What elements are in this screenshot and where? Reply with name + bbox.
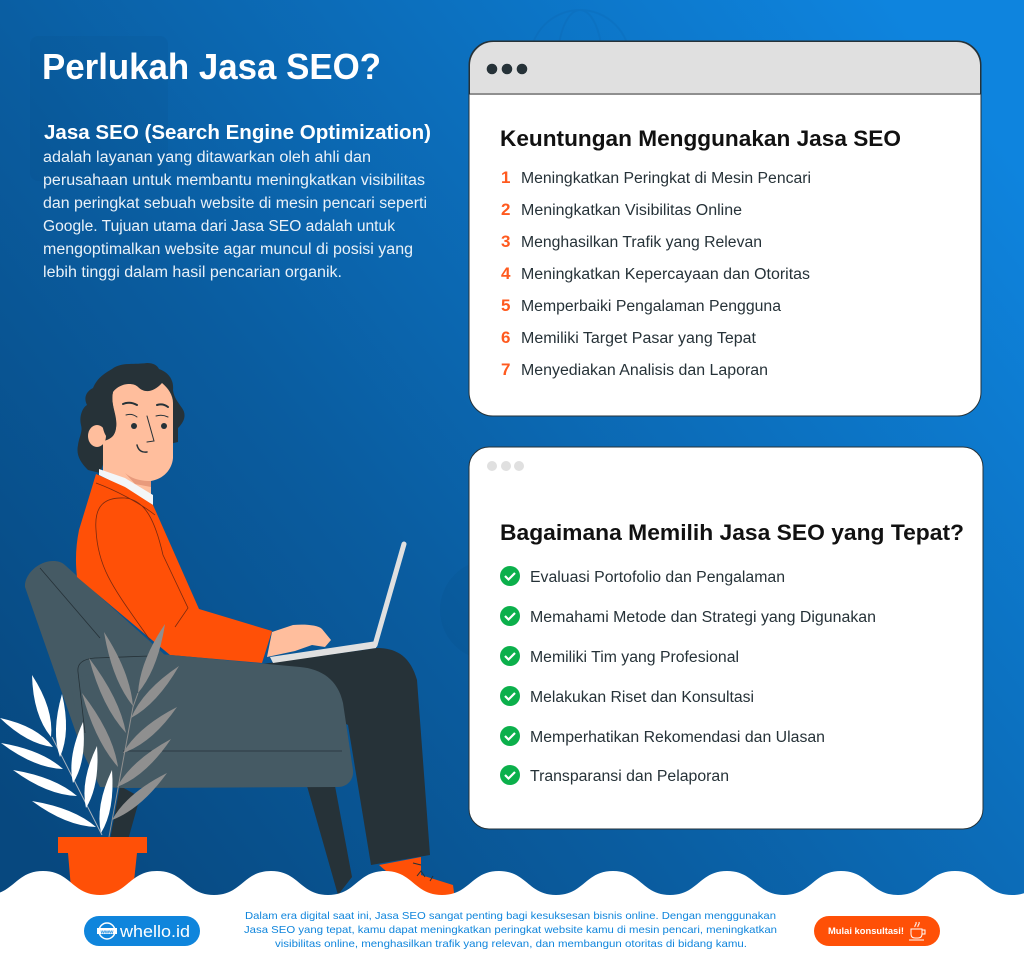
numbered list: Memperbaiki Pengalaman Pengguna bbox=[521, 298, 781, 315]
browser dots bbox=[487, 64, 527, 74]
heading: Perlukah Jasa SEO?: Perlukah Jasa SEO? bbox=[42, 46, 381, 87]
panel: memilih jasa seo bbox=[469, 447, 983, 829]
numbered list: Menghasilkan Trafik yang Relevan bbox=[521, 234, 762, 251]
numbered list: 6 bbox=[501, 328, 510, 347]
panel heading: Keuntungan Menggunakan Jasa SEO bbox=[500, 126, 901, 151]
call to action button bbox=[814, 916, 940, 946]
jacket bbox=[76, 474, 272, 663]
intro text block: Google. Tujuan utama dari Jasa SEO adalah untuk bbox=[43, 218, 395, 235]
pot rim bbox=[58, 837, 147, 853]
numbered list: 1 bbox=[501, 168, 510, 187]
pot body bbox=[68, 853, 137, 900]
facial features bbox=[123, 403, 168, 452]
browser header bar bbox=[470, 42, 980, 94]
button label: Mulai konsultasi! bbox=[828, 926, 904, 937]
card body bbox=[469, 447, 983, 829]
checklist: Evaluasi Portofolio dan Pengalaman bbox=[530, 569, 785, 586]
footer text: Dalam era digital saat ini, Jasa SEO sangat penting bagi kesuksesan bisnis online. Dengan menggunakan bbox=[245, 910, 776, 922]
numbered list: Meningkatkan Visibilitas Online bbox=[521, 202, 742, 219]
header shadow line bbox=[470, 93, 980, 95]
illustration: man on armchair with laptop bbox=[25, 363, 455, 900]
chair seams bbox=[40, 568, 342, 751]
numbered list: Menyediakan Analisis dan Laporan bbox=[521, 362, 768, 379]
numbered list: Meningkatkan Kepercayaan dan Otoritas bbox=[521, 266, 810, 283]
intro text block: perusahaan untuk membantu meningkatkan visibilitas bbox=[43, 172, 425, 189]
icon: globe: www bbox=[100, 930, 114, 936]
shoe bbox=[379, 857, 455, 900]
faint background decorations: 40% bbox=[87, 100, 113, 115]
numbered list: 7 bbox=[501, 360, 510, 379]
hair bbox=[77, 363, 185, 473]
numbered list: 3 bbox=[501, 232, 510, 251]
intro subheading: Jasa SEO (Search Engine Optimization) bbox=[44, 122, 431, 144]
face and neck bbox=[103, 383, 173, 498]
shoe laces bbox=[413, 863, 433, 881]
sideburn bbox=[100, 392, 116, 438]
white stem bbox=[52, 737, 102, 835]
faint background decorations bbox=[30, 10, 630, 660]
ear bbox=[88, 425, 106, 447]
trousers bbox=[262, 648, 430, 865]
numbered list: 5 bbox=[501, 296, 510, 315]
footer text bbox=[244, 910, 777, 950]
neck shadow bbox=[125, 473, 151, 487]
checklist bbox=[500, 566, 876, 785]
jacket seams bbox=[96, 483, 188, 640]
browser dots bbox=[487, 461, 524, 471]
website label: whello.id bbox=[119, 922, 190, 941]
intro text block bbox=[43, 122, 431, 281]
intro text block: dan peringkat sebuah website di mesin pencari seperti bbox=[43, 195, 427, 212]
footer text: visibilitas online, menghasilkan trafik yang relevan, dan membangun otoritas di bidang kamu. bbox=[275, 938, 747, 950]
panel heading: Bagaimana Memilih Jasa SEO yang Tepat? bbox=[500, 520, 964, 545]
laptop screen bbox=[375, 544, 404, 645]
numbered list: Meningkatkan Peringkat di Mesin Pencari bbox=[521, 170, 811, 187]
gray stem bbox=[109, 693, 138, 837]
intro text block: lebih tinggi dalam hasil pencarian organik. bbox=[43, 264, 342, 281]
chair back legs bbox=[110, 786, 140, 840]
hand bbox=[267, 625, 331, 657]
numbered list: 2 bbox=[501, 200, 510, 219]
checklist: Memiliki Tim yang Profesional bbox=[530, 649, 739, 666]
icon: coffee cup bbox=[909, 922, 925, 940]
panel: keuntungan bbox=[469, 41, 981, 416]
gray leaves bbox=[82, 624, 179, 820]
chair front leg bbox=[307, 786, 352, 895]
footer wave bbox=[0, 871, 1024, 962]
website badge bbox=[84, 916, 200, 946]
armchair seat bbox=[70, 654, 353, 788]
numbered list: 4 bbox=[501, 264, 511, 283]
checklist: Melakukan Riset dan Konsultasi bbox=[530, 689, 754, 706]
shirt collar bbox=[99, 469, 153, 505]
numbered list bbox=[501, 168, 811, 379]
checklist: Memahami Metode dan Strategi yang Digunakan bbox=[530, 609, 876, 626]
footer text: Jasa SEO yang tepat, kamu dapat meningkatkan peringkat website kamu di mesin pencari, meningkatkan bbox=[244, 924, 777, 936]
intro text block: adalah layanan yang ditawarkan oleh ahli dan bbox=[43, 149, 371, 166]
chair backrest bbox=[25, 561, 170, 787]
illustration: potted plant bbox=[0, 624, 179, 900]
intro text block: mengoptimalkan website agar muncul di posisi yang bbox=[43, 241, 413, 258]
numbered list: Memiliki Target Pasar yang Tepat bbox=[521, 330, 757, 347]
checklist: Transparansi dan Pelaporan bbox=[530, 768, 729, 785]
laptop base bbox=[270, 641, 377, 663]
checklist: Memperhatikan Rekomendasi dan Ulasan bbox=[530, 729, 825, 746]
white leaves bbox=[0, 675, 113, 833]
card body bbox=[469, 41, 981, 416]
